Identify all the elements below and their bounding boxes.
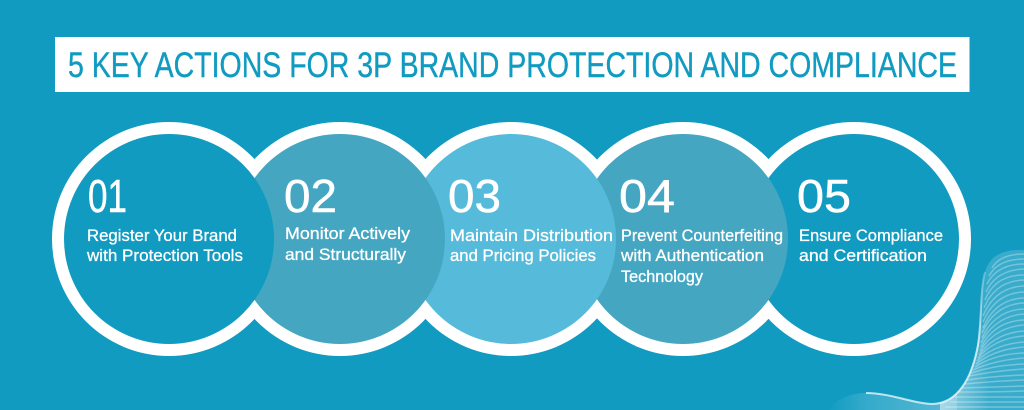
step 04 <box>619 170 783 286</box>
decorative wave <box>827 245 1024 410</box>
step 03: Maintain Distribution <box>450 226 613 245</box>
step 04: Technology <box>621 267 703 286</box>
step 04: with Authentication <box>620 246 764 265</box>
step 04: 04 <box>619 170 675 222</box>
step 03: and Pricing Policies <box>450 246 596 265</box>
white circle rings <box>52 122 971 356</box>
step 05: Ensure Compliance <box>799 226 943 245</box>
step 03 <box>448 170 613 265</box>
step 02: and Structurally <box>285 245 406 264</box>
step 05: 05 <box>797 170 851 222</box>
step 01 <box>86 170 243 265</box>
step 02: 02 <box>284 170 337 222</box>
step 01: Register Your Brand <box>87 226 237 245</box>
step 03: 03 <box>448 170 501 222</box>
step 05 <box>797 170 943 265</box>
step 04: Prevent Counterfeiting <box>621 226 783 245</box>
wave bright edge <box>866 272 985 404</box>
title banner <box>55 37 970 92</box>
step 01: with Protection Tools <box>86 246 243 265</box>
step 05: and Certification <box>799 246 927 265</box>
step 01: 01 <box>88 170 127 222</box>
step 02 <box>284 170 411 264</box>
circle fills <box>64 134 959 344</box>
step 02: Monitor Actively <box>285 224 411 243</box>
